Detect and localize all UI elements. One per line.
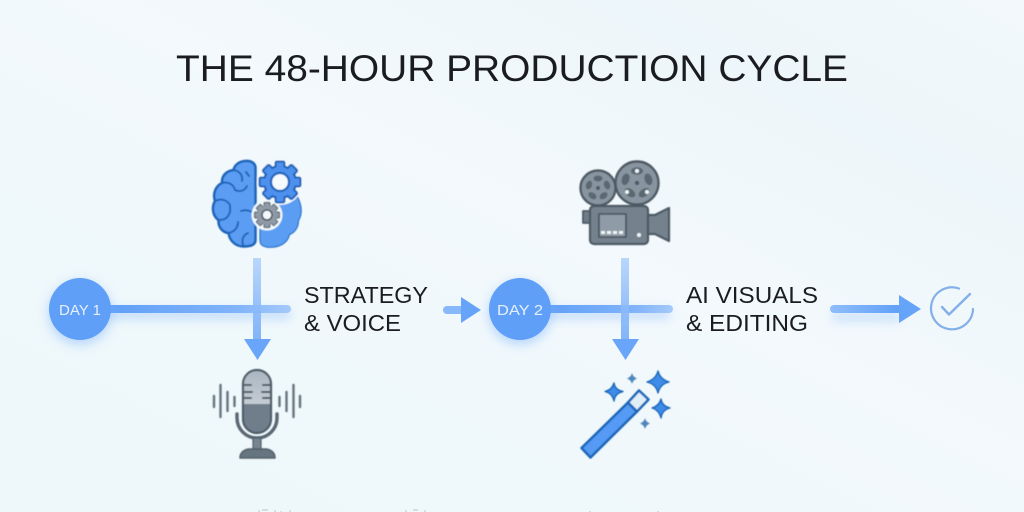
mic capsule (243, 370, 271, 433)
sound waves (214, 385, 300, 417)
icon: microphone (214, 370, 300, 458)
day 2 timeline (489, 258, 673, 360)
arrow: to completion (830, 295, 921, 323)
label: AI visuals and editing (686, 282, 818, 336)
arrow: day 1 to day 2 (443, 297, 481, 323)
day 1 connector bar (105, 305, 291, 319)
camera body (583, 206, 648, 244)
day 2 badge (489, 278, 551, 344)
icon: completion check (931, 287, 973, 329)
sparkles (605, 371, 670, 418)
clipped caption remnants at bottom edge (259, 510, 658, 512)
day 1 badge (49, 278, 111, 344)
down arrow to microphone (244, 258, 271, 360)
label: strategy and voice: & VOICE (304, 310, 401, 336)
mic holder and stand (237, 414, 277, 458)
label: AI visuals and editing: AI VISUALS (686, 282, 818, 308)
large blue gear (260, 162, 300, 202)
small grey gear (254, 202, 280, 228)
wand shaft (582, 390, 648, 458)
right brain lobe with gear cut-outs (252, 159, 303, 247)
label: strategy and voice: STRATEGY (304, 282, 428, 308)
film reels (580, 162, 658, 206)
label: strategy and voice (304, 282, 428, 336)
camera lens (648, 208, 669, 241)
day 1 badge: DAY 1 (59, 302, 101, 319)
day 2 connector bar (545, 305, 673, 319)
icon: film camera (580, 162, 669, 244)
icon: magic wand (582, 371, 670, 458)
title: THE 48-HOUR PRODUCTION CYCLE (176, 48, 848, 89)
icon: brain with gears (213, 159, 303, 247)
label: AI visuals and editing: & EDITING (686, 310, 808, 336)
day 2 badge: DAY 2 (497, 302, 543, 319)
left brain hemisphere (213, 161, 256, 246)
day 1 timeline (49, 258, 291, 360)
down arrow to magic wand (612, 258, 639, 360)
